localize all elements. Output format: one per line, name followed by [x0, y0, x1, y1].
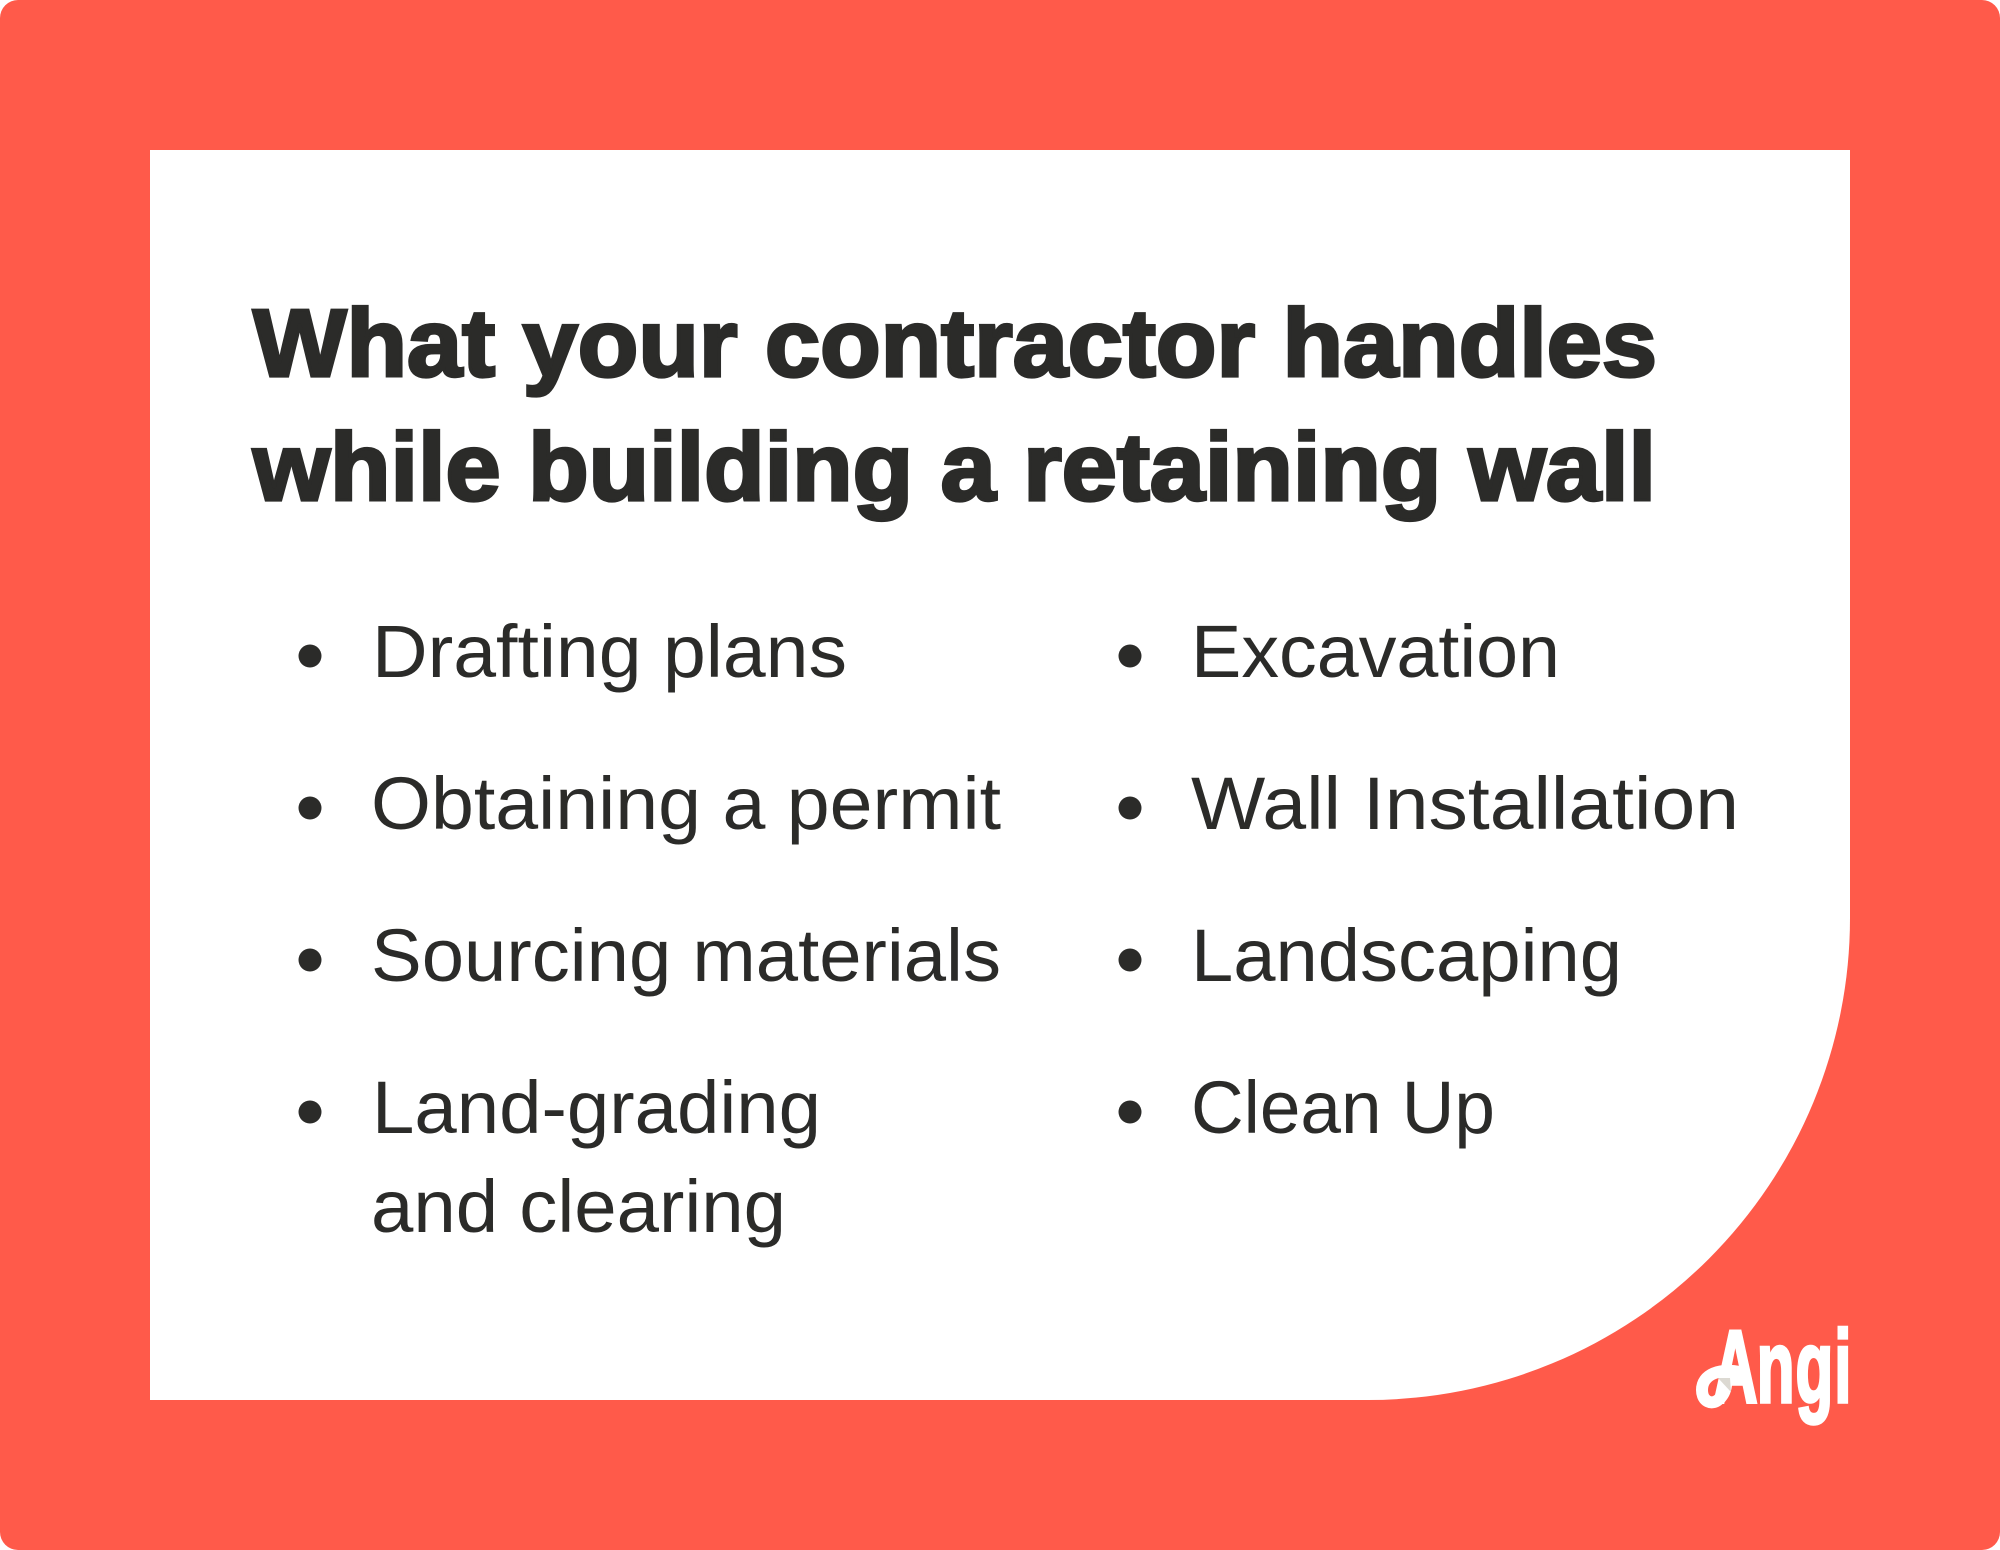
list: right column [1118, 610, 1739, 1149]
item: land-grading and clearing: Land-grading [372, 1066, 821, 1149]
list: left column [298, 610, 1001, 1248]
title: while building a retaining wall [252, 414, 1656, 521]
item: landscaping: Landscaping [1191, 914, 1622, 997]
item: clean up: Clean Up [1191, 1066, 1495, 1149]
item: sourcing materials: Sourcing materials [371, 914, 1001, 997]
logo: Angi: Angi [1713, 1309, 1851, 1424]
item: obtaining a permit: Obtaining a permit [371, 762, 1001, 845]
item: land-grading and clearing: and clearing [371, 1165, 786, 1248]
item: land-grading and clearing [298, 1066, 821, 1248]
item: wall installation: Wall Installation [1191, 762, 1739, 845]
title [252, 290, 1657, 521]
item: excavation: Excavation [1191, 610, 1560, 693]
title: What your contractor handles [253, 290, 1657, 397]
item: drafting plans: Drafting plans [372, 610, 847, 693]
white content panel with curved corner [150, 150, 1850, 1400]
